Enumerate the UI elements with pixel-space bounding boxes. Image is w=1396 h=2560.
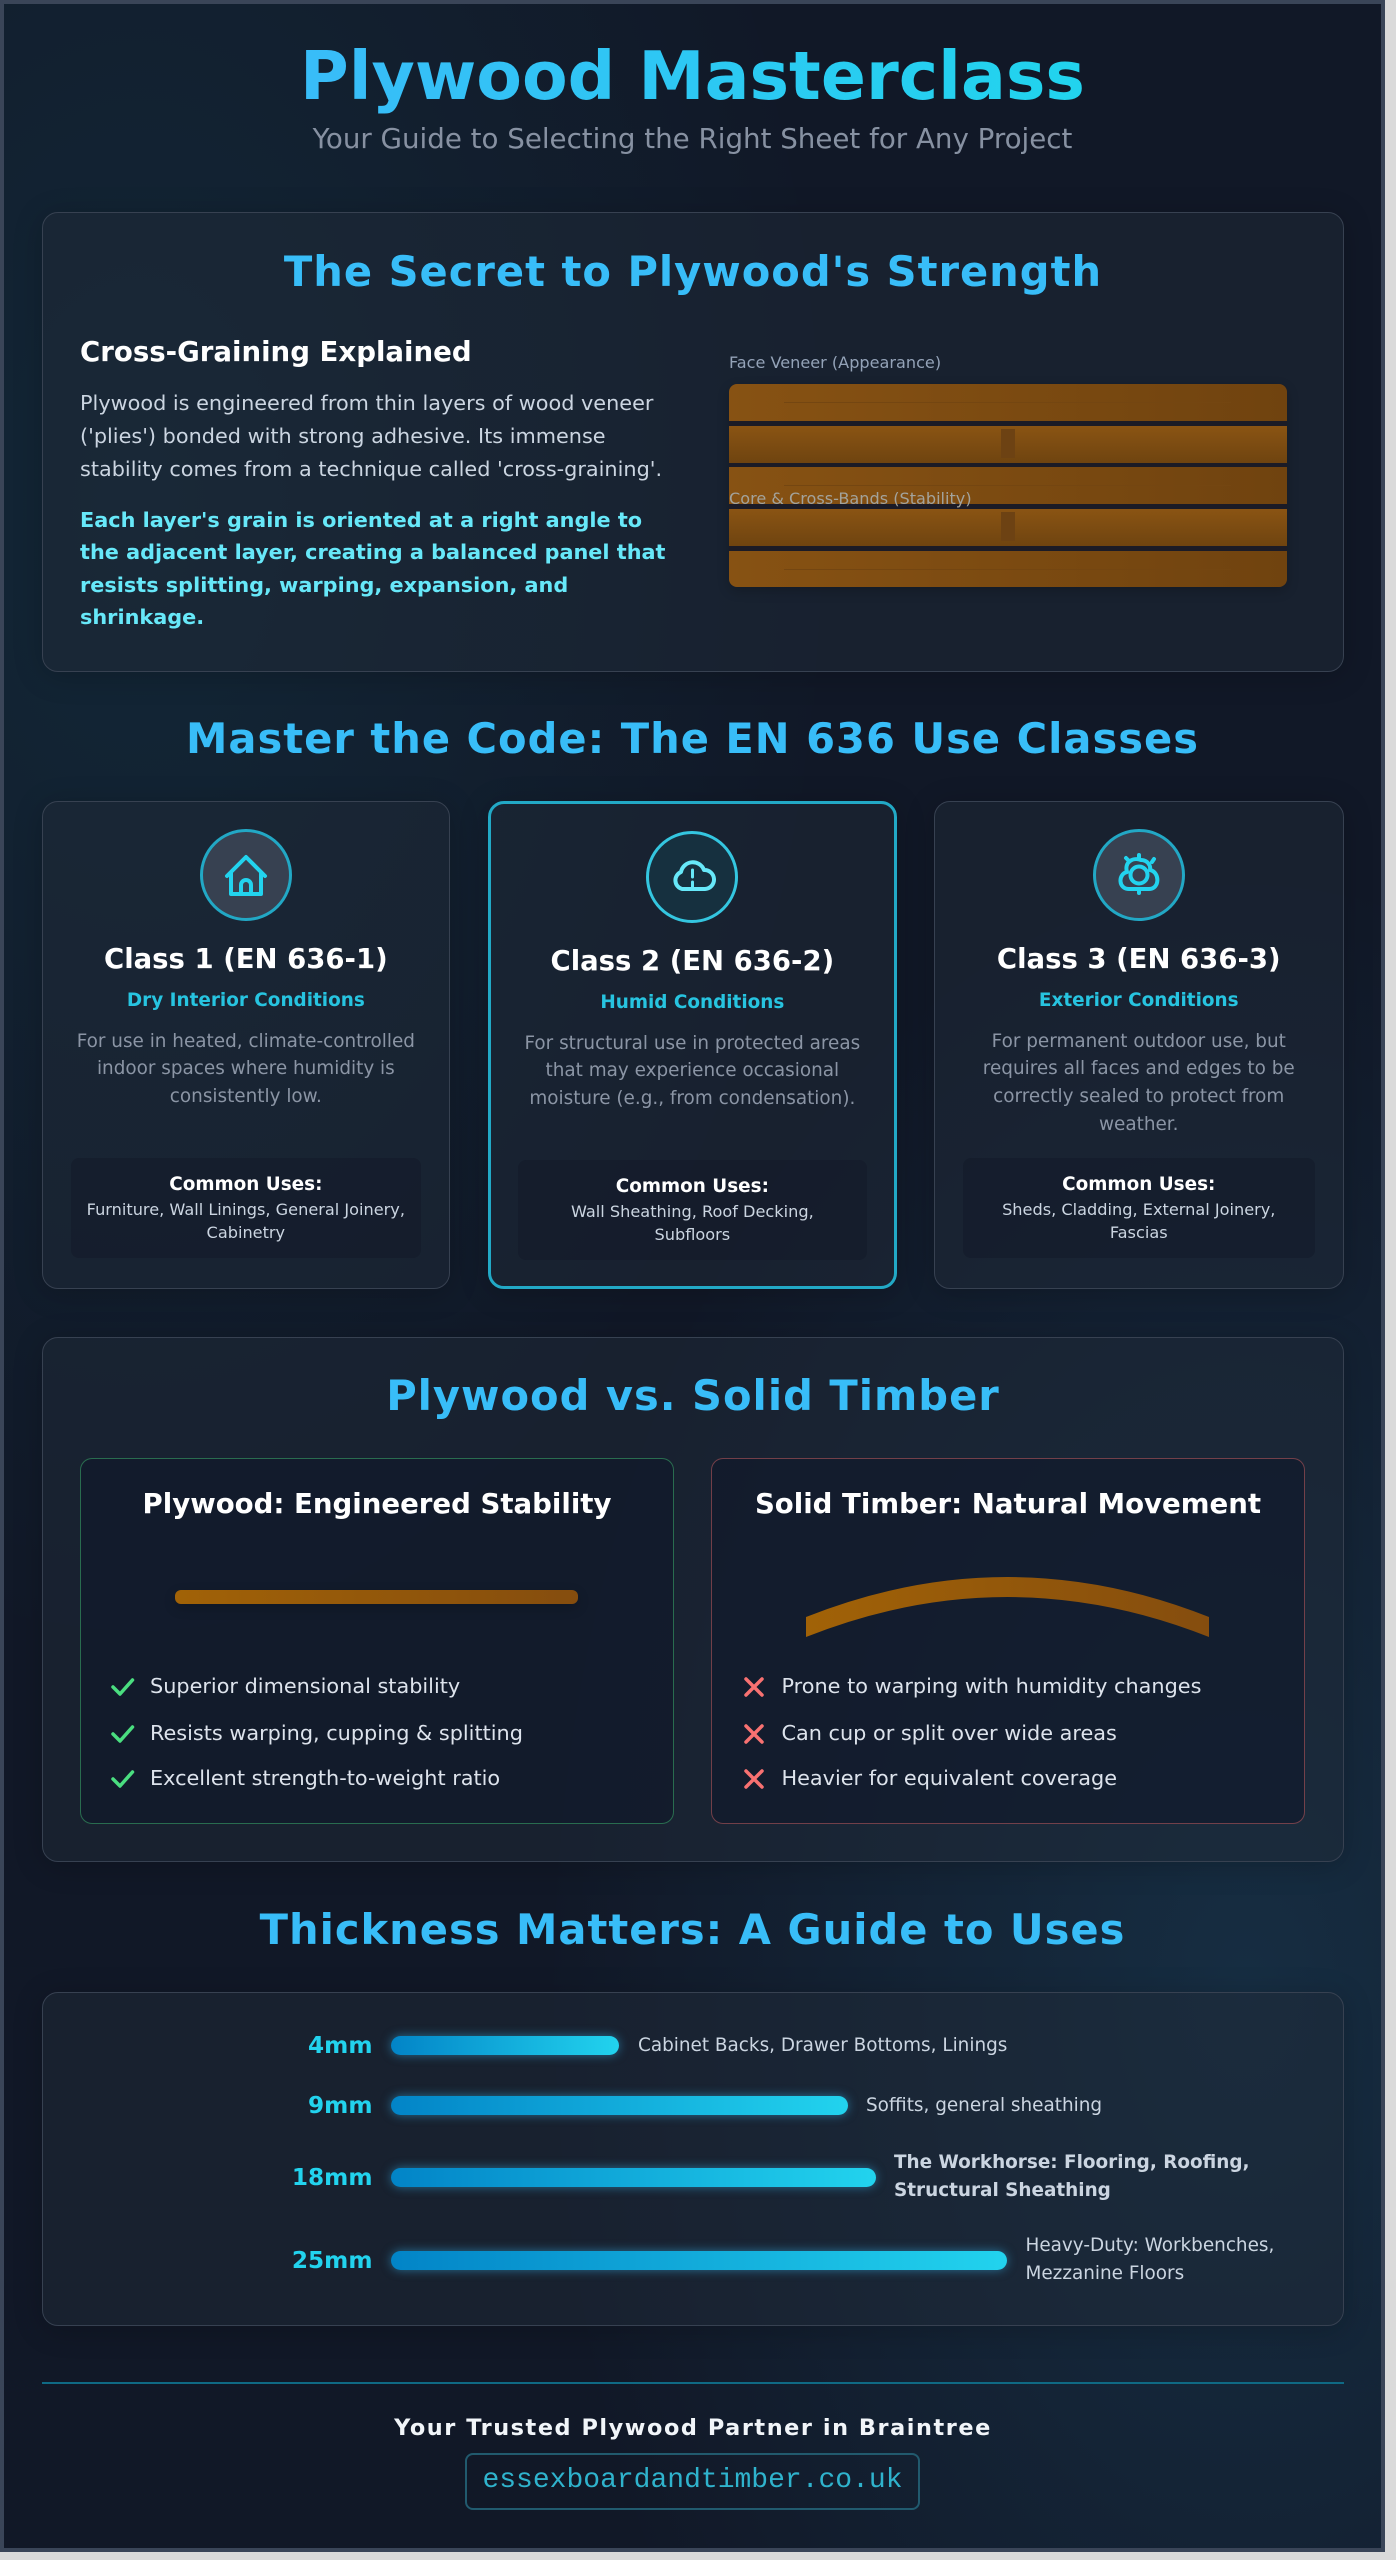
illustration: warped timber — [806, 1577, 1209, 1637]
class 1 description: consistently low. — [170, 1086, 322, 1107]
icon: cloud with alert — [646, 831, 738, 923]
row: 25mm: Mezzanine Floors — [1026, 2263, 1184, 2284]
class 3 description: requires all faces and edges to be — [983, 1058, 1295, 1079]
panel: thickness chart: Heavy-Duty: Workbenches, — [1026, 2235, 1274, 2256]
text block: highlighted explanation — [80, 508, 666, 629]
class 3 description — [983, 1031, 1295, 1135]
class 1 common uses: Common Uses: — [169, 1174, 322, 1195]
footer tagline: Your Trusted Plywood Partner in Braintree — [394, 2414, 992, 2440]
class 3 title: Class 3 (EN 636-3) — [997, 942, 1281, 974]
icon: sun and cloud — [1093, 829, 1185, 921]
panel: the secret to plywood's strength — [42, 212, 1344, 672]
list item: strength to weight: Excellent strength-to-weight ratio — [150, 1766, 500, 1790]
panel: class 2 — [488, 801, 897, 1289]
class 3 common uses — [963, 1158, 1314, 1258]
class 3 common uses: Common Uses: — [1062, 1174, 1215, 1195]
class 2 common uses: Subfloors — [654, 1225, 730, 1244]
panel: plywood — [80, 1458, 674, 1824]
row: 18mm — [292, 2152, 1250, 2201]
heading: comparison: Plywood vs. Solid Timber — [386, 1371, 1000, 1420]
class 1 description: indoor spaces where humidity is — [97, 1058, 395, 1079]
class 2 common uses — [518, 1160, 867, 1260]
class 1 description — [77, 1031, 415, 1107]
timber heading: Solid Timber: Natural Movement — [755, 1487, 1261, 1520]
row: 18mm: 18mm — [292, 2164, 372, 2191]
class 3 condition: Exterior Conditions — [1039, 990, 1239, 1011]
class 3 description: correctly sealed to protect from — [993, 1086, 1284, 1107]
row: 4mm — [308, 2030, 1007, 2062]
text block: explanation: ('plies') bonded with strong adhesive. Its immense — [80, 424, 606, 448]
panel: solid timber — [711, 1458, 1305, 1824]
list item: cup or split: Can cup or split over wide areas — [782, 1720, 1117, 1744]
title: Plywood Masterclass — [300, 37, 1085, 115]
row: 9mm: Soffits, general sheathing — [866, 2095, 1102, 2116]
class 1 description: For use in heated, climate-controlled — [77, 1031, 415, 1052]
row: 25mm — [292, 2235, 1274, 2284]
text block: explanation: stability comes from a technique called 'cross-graining'. — [80, 457, 662, 481]
row: 4mm: Cabinet Backs, Drawer Bottoms, Linings — [638, 2035, 1007, 2056]
text block: explanation: Plywood is engineered from thin layers of wood veneer — [80, 391, 653, 415]
illustration: flat plywood plank — [175, 1590, 578, 1604]
website address — [465, 2453, 920, 2510]
class 3 common uses: Fascias — [1110, 1223, 1168, 1242]
row: 9mm — [308, 2090, 1102, 2122]
list item: resists warping: Resists warping, cupping & splitting — [150, 1720, 523, 1744]
text block: explanation — [80, 391, 662, 481]
list item: stability: Superior dimensional stability — [150, 1674, 460, 1698]
icon: house — [200, 829, 292, 921]
row: 9mm: 9mm — [308, 2092, 372, 2119]
class 1 title: Class 1 (EN 636-1) — [104, 942, 388, 974]
diagram: plywood layers — [729, 353, 1287, 587]
heading: strength: The Secret to Plywood's Strength — [284, 247, 1102, 296]
layer stack — [729, 384, 1287, 587]
footer — [42, 2382, 1344, 2510]
list item: prone to warping: Prone to warping with humidity changes — [782, 1674, 1201, 1698]
panel: thickness chart: The Workhorse: Flooring, Roofing, — [894, 2152, 1250, 2173]
class 3 common uses: Sheds, Cladding, External Joinery, — [1002, 1200, 1275, 1219]
class 2 title: Class 2 (EN 636-2) — [551, 944, 834, 976]
class 2 description: that may experience occasional — [546, 1060, 839, 1081]
row: 4mm: 4mm — [308, 2032, 372, 2059]
heading: EN 636 use classes: Master the Code: The EN 636 Use Classes — [186, 714, 1199, 762]
class 1 common uses: Furniture, Wall Linings, General Joinery, — [87, 1200, 405, 1219]
class 2 description: moisture (e.g., from condensation). — [529, 1088, 855, 1109]
label: face veneer: Face Veneer (Appearance) — [729, 353, 941, 372]
class 2 condition: Humid Conditions — [600, 992, 784, 1013]
row: 25mm: 25mm — [292, 2247, 372, 2274]
subtitle: Your Guide to Selecting the Right Sheet for Any Project — [313, 122, 1072, 155]
class 2 common uses: Wall Sheathing, Roof Decking, — [571, 1202, 814, 1221]
row: 18mm: Structural Sheathing — [894, 2180, 1111, 2201]
heading: thickness: Thickness Matters: A Guide to Uses — [260, 1904, 1125, 1954]
text block: highlighted explanation: the adjacent layer, creating a balanced panel that — [80, 540, 666, 564]
class 1 condition: Dry Interior Conditions — [127, 990, 365, 1011]
class 3 description: For permanent outdoor use, but — [992, 1031, 1286, 1052]
label: core and cross-bands: Core & Cross-Bands (Stability) — [729, 489, 972, 508]
plywood heading: Plywood: Engineered Stability — [143, 1487, 611, 1520]
class 3 description: weather. — [1099, 1114, 1179, 1135]
panel: plywood vs solid timber — [42, 1337, 1344, 1862]
class 2 description: For structural use in protected areas — [524, 1033, 860, 1054]
list item: heavier: Heavier for equivalent coverage — [782, 1766, 1117, 1790]
website address: essexboardandtimber.co.uk — [482, 2465, 903, 2496]
text block: highlighted explanation: shrinkage. — [80, 605, 204, 629]
text block: highlighted explanation: Each layer's grain is oriented at a right angle to — [80, 508, 642, 532]
panel: class 3 — [934, 801, 1344, 1289]
class 2 description — [524, 1033, 860, 1109]
class 1 common uses — [70, 1158, 421, 1258]
panel: thickness chart — [42, 1992, 1344, 2326]
text block: highlighted explanation: resists splitting, warping, expansion, and — [80, 573, 568, 597]
subheading: cross-graining: Cross-Graining Explained — [80, 335, 472, 368]
panel: class 1 — [42, 801, 450, 1289]
class 1 common uses: Cabinetry — [207, 1223, 285, 1242]
class 2 common uses: Common Uses: — [616, 1176, 769, 1197]
